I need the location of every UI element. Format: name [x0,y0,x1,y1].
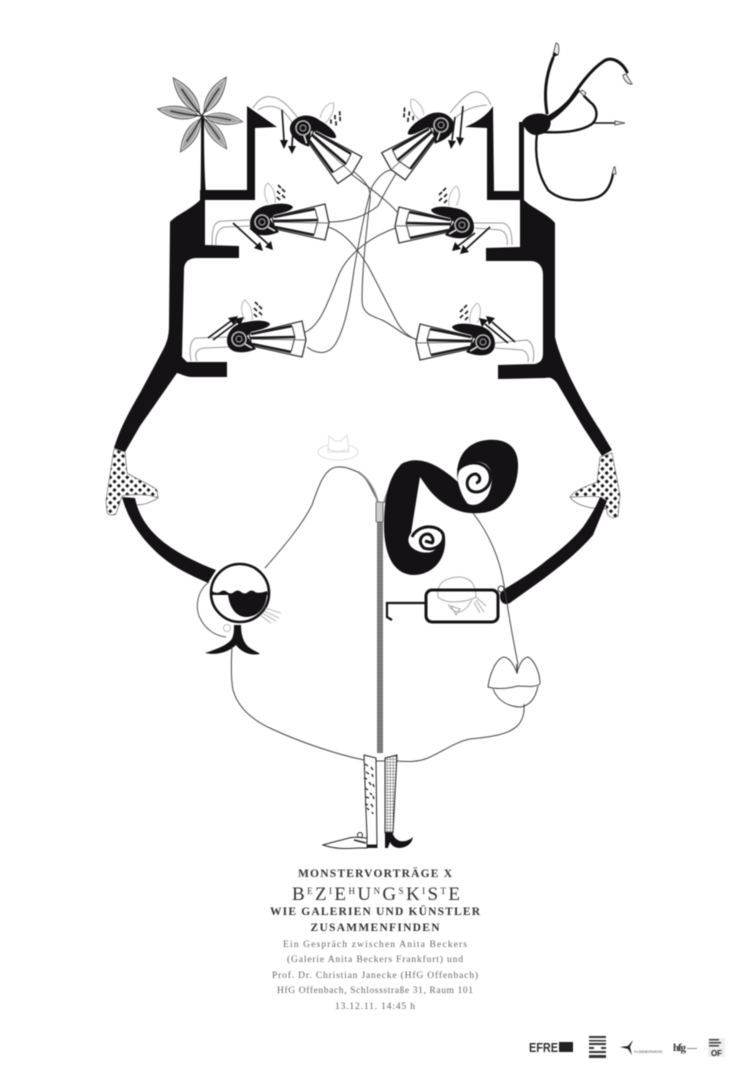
logo: OF: OF [711,1049,722,1058]
collar arc [197,582,226,637]
heading line 2: K [406,884,420,905]
lower spiral [412,527,443,549]
right foot sole [570,497,606,509]
heading line 2: S [428,884,438,905]
figure: middle left [250,183,329,240]
heading line 2: E [334,884,346,905]
right boot [385,755,413,848]
logo: striped block [589,1036,606,1058]
figure: middle right [395,186,474,243]
temple arm [387,603,425,620]
heading line 2: Z [315,884,327,905]
heading line 2: B [292,884,305,905]
black shoe [385,832,413,848]
upper spiral [458,463,490,492]
left arm band [122,497,216,583]
frame [426,590,498,622]
heading line 2: E [448,884,460,905]
hat [318,435,358,460]
heading line 3: WIE GALERIEN UND KÜNSTLER [270,904,481,918]
fur speckles [364,764,374,814]
date: 13.12.11. 14:45 h [335,1002,415,1012]
wire: head to zipper [265,467,377,568]
grey pipes [190,92,534,362]
heading line 2: I [329,886,332,896]
zipper tab [376,502,383,522]
speaker line 1: Ein Gespräch zwischen Anita Beckers [283,940,467,950]
shoe [323,837,367,849]
speaker line 3: Prof. Dr. Christian Janecke (HfG Offenbach) [272,970,478,981]
hinge [498,586,504,592]
left trunk silhouette [114,106,277,452]
zipper branches [358,464,402,503]
figure: bottom right [416,303,495,360]
logo: star: FLIMMERWERK [634,1049,663,1054]
shaft [385,755,397,833]
wire: head to boots [231,647,364,760]
heading line 2: I [422,886,425,896]
root knot [522,114,551,135]
wire: hair to lips [473,513,518,664]
heading line 2: T [440,886,446,896]
right trunk silhouette [465,106,612,456]
heading line 2: H [348,886,355,896]
lower curl eye [410,526,439,552]
logo: OF [708,1038,725,1058]
black curl hair [384,440,518,575]
glasses [387,577,504,622]
heel [367,845,377,848]
eye patch [228,594,267,617]
left boot [323,755,377,849]
crossing wires [303,167,422,353]
heading line 4: ZUSAMMENFINDEN [310,922,440,934]
upper curl eye [458,462,492,505]
small ear [224,624,230,632]
left building structure [114,106,277,452]
heading line 2: E [307,886,313,896]
heading line 1: MONSTERVORTRÄGE X [298,866,453,880]
bow [358,832,362,838]
figure: bottom left [227,300,306,357]
heading line 2: N [373,886,380,896]
wire: boots to lips [376,704,524,762]
figure: top right [365,88,462,183]
brow wave [212,590,268,595]
arrows [208,106,515,343]
logo: EFRE: EFRE [529,1040,558,1055]
speaker line 2: (Galerie Anita Beckers Frankfurt) und [287,954,463,965]
left head [197,564,281,655]
venue: HfG Offenbach, Schlossstraße 31, Raum 101 [277,985,473,996]
left houndstooth foot [106,449,158,515]
dancer figures [227,88,495,360]
moustache [205,625,260,655]
zipper [358,464,402,753]
root tree [522,43,632,200]
left foot sole [136,498,158,505]
logo: star [620,1040,663,1055]
hat and face sketch [438,577,486,615]
text block [270,866,481,1012]
eyelashes [260,608,281,623]
shaft [364,755,377,847]
lips [488,657,540,707]
curl mass [384,440,518,575]
flower [156,73,244,155]
heading line 2: U [357,884,371,905]
logo row [529,1036,725,1058]
logo: hfg: hfg [673,1042,686,1054]
right building structure [465,106,612,456]
right arm band [500,497,607,604]
zipper strip [377,505,383,753]
heading line 2: S [399,886,404,896]
head circle [211,564,269,622]
right houndstooth foot [570,453,620,518]
figure: top left [282,91,379,186]
left flower stem [200,116,206,195]
logo: hfg [673,1042,697,1054]
heading line 2: G [382,884,396,905]
